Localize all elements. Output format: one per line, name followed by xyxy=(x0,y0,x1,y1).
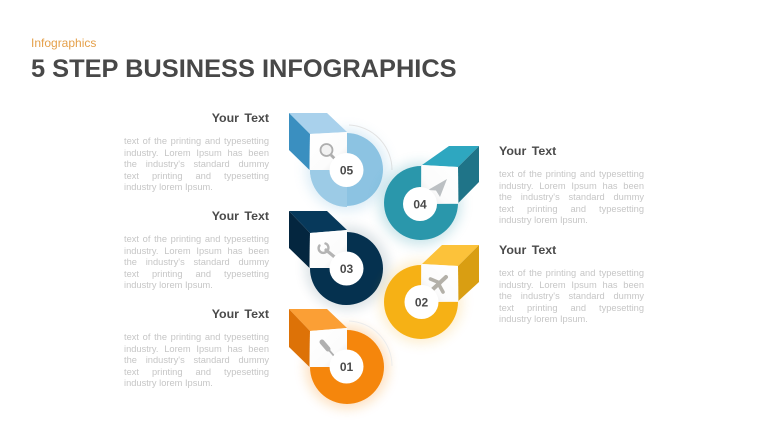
kicker: Infographics: Infographics xyxy=(31,36,96,50)
icon: airplane xyxy=(430,277,446,292)
text block: step 03: industry. Lorem Ipsum has been xyxy=(124,246,269,256)
icon: paper plane xyxy=(428,179,447,197)
title: 5 STEP BUSINESS INFOGRAPHICS xyxy=(31,54,457,82)
icon: pen xyxy=(322,342,335,357)
number badge 04: 04 xyxy=(413,198,427,212)
text block: step 04: industry lorem Ipsum. xyxy=(499,215,588,225)
step 05: light blue ring and cube xyxy=(289,113,392,211)
text block: step 05: text of the printing and typesetting xyxy=(124,136,269,146)
text block: step 05: industry. Lorem Ipsum has been xyxy=(124,148,269,158)
heading: step 03: Your Text xyxy=(212,209,269,223)
text block: step 05: text printing and typesetting xyxy=(124,171,269,181)
text block: step 01 xyxy=(124,332,269,388)
text block: step 04 xyxy=(499,169,644,225)
number badge 03: 03 xyxy=(340,262,353,276)
text block: step 03 xyxy=(124,234,269,290)
icon: magnifier xyxy=(320,144,336,160)
text block: step 03: industry lorem Ipsum. xyxy=(124,280,213,290)
text block: step 02 xyxy=(499,268,644,324)
number badge 01: 01 xyxy=(340,360,353,374)
text block: step 05: the industry's standard dummy xyxy=(124,159,269,169)
text block: step 04: industry. Lorem Ipsum has been xyxy=(499,181,644,191)
step 03: navy ring and cube xyxy=(289,211,388,309)
text block: step 02: text printing and typesetting xyxy=(499,303,644,313)
number badge 02: 02 xyxy=(415,296,428,310)
step 02: yellow ring and cube xyxy=(380,245,479,343)
heading: step 04: Your Text xyxy=(499,144,556,158)
text block: step 01: the industry's standard dummy xyxy=(124,355,269,365)
step 04: teal ring and cube xyxy=(379,146,479,245)
heading: step 05: Your Text xyxy=(212,111,269,125)
text block: step 03: the industry's standard dummy xyxy=(124,257,269,267)
text block: step 03: text of the printing and typesetting xyxy=(124,234,269,244)
step 01: orange ring and cube xyxy=(289,309,392,408)
text block: step 04: text printing and typesetting xyxy=(499,204,644,214)
text block: step 03: text printing and typesetting xyxy=(124,269,269,279)
text block: step 01: text printing and typesetting xyxy=(124,367,269,377)
text block: step 01: industry lorem Ipsum. xyxy=(124,378,213,388)
text block: step 02: the industry's standard dummy xyxy=(499,291,644,301)
text block: step 02: industry lorem Ipsum. xyxy=(499,314,588,324)
text block: step 04: the industry's standard dummy xyxy=(499,192,644,202)
heading: step 02: Your Text xyxy=(499,243,556,257)
text block: step 05: industry lorem Ipsum. xyxy=(124,182,213,192)
text block: step 01: industry. Lorem Ipsum has been xyxy=(124,344,269,354)
text block: step 05 xyxy=(124,136,269,192)
text block: step 02: industry. Lorem Ipsum has been xyxy=(499,280,644,290)
heading: step 01: Your Text xyxy=(212,307,269,321)
icon: wrench xyxy=(319,244,337,259)
text block: step 04: text of the printing and typesetting xyxy=(499,169,644,179)
number badge 05: 05 xyxy=(340,164,353,178)
text block: step 01: text of the printing and typesetting xyxy=(124,332,269,342)
text block: step 02: text of the printing and typesetting xyxy=(499,268,644,278)
